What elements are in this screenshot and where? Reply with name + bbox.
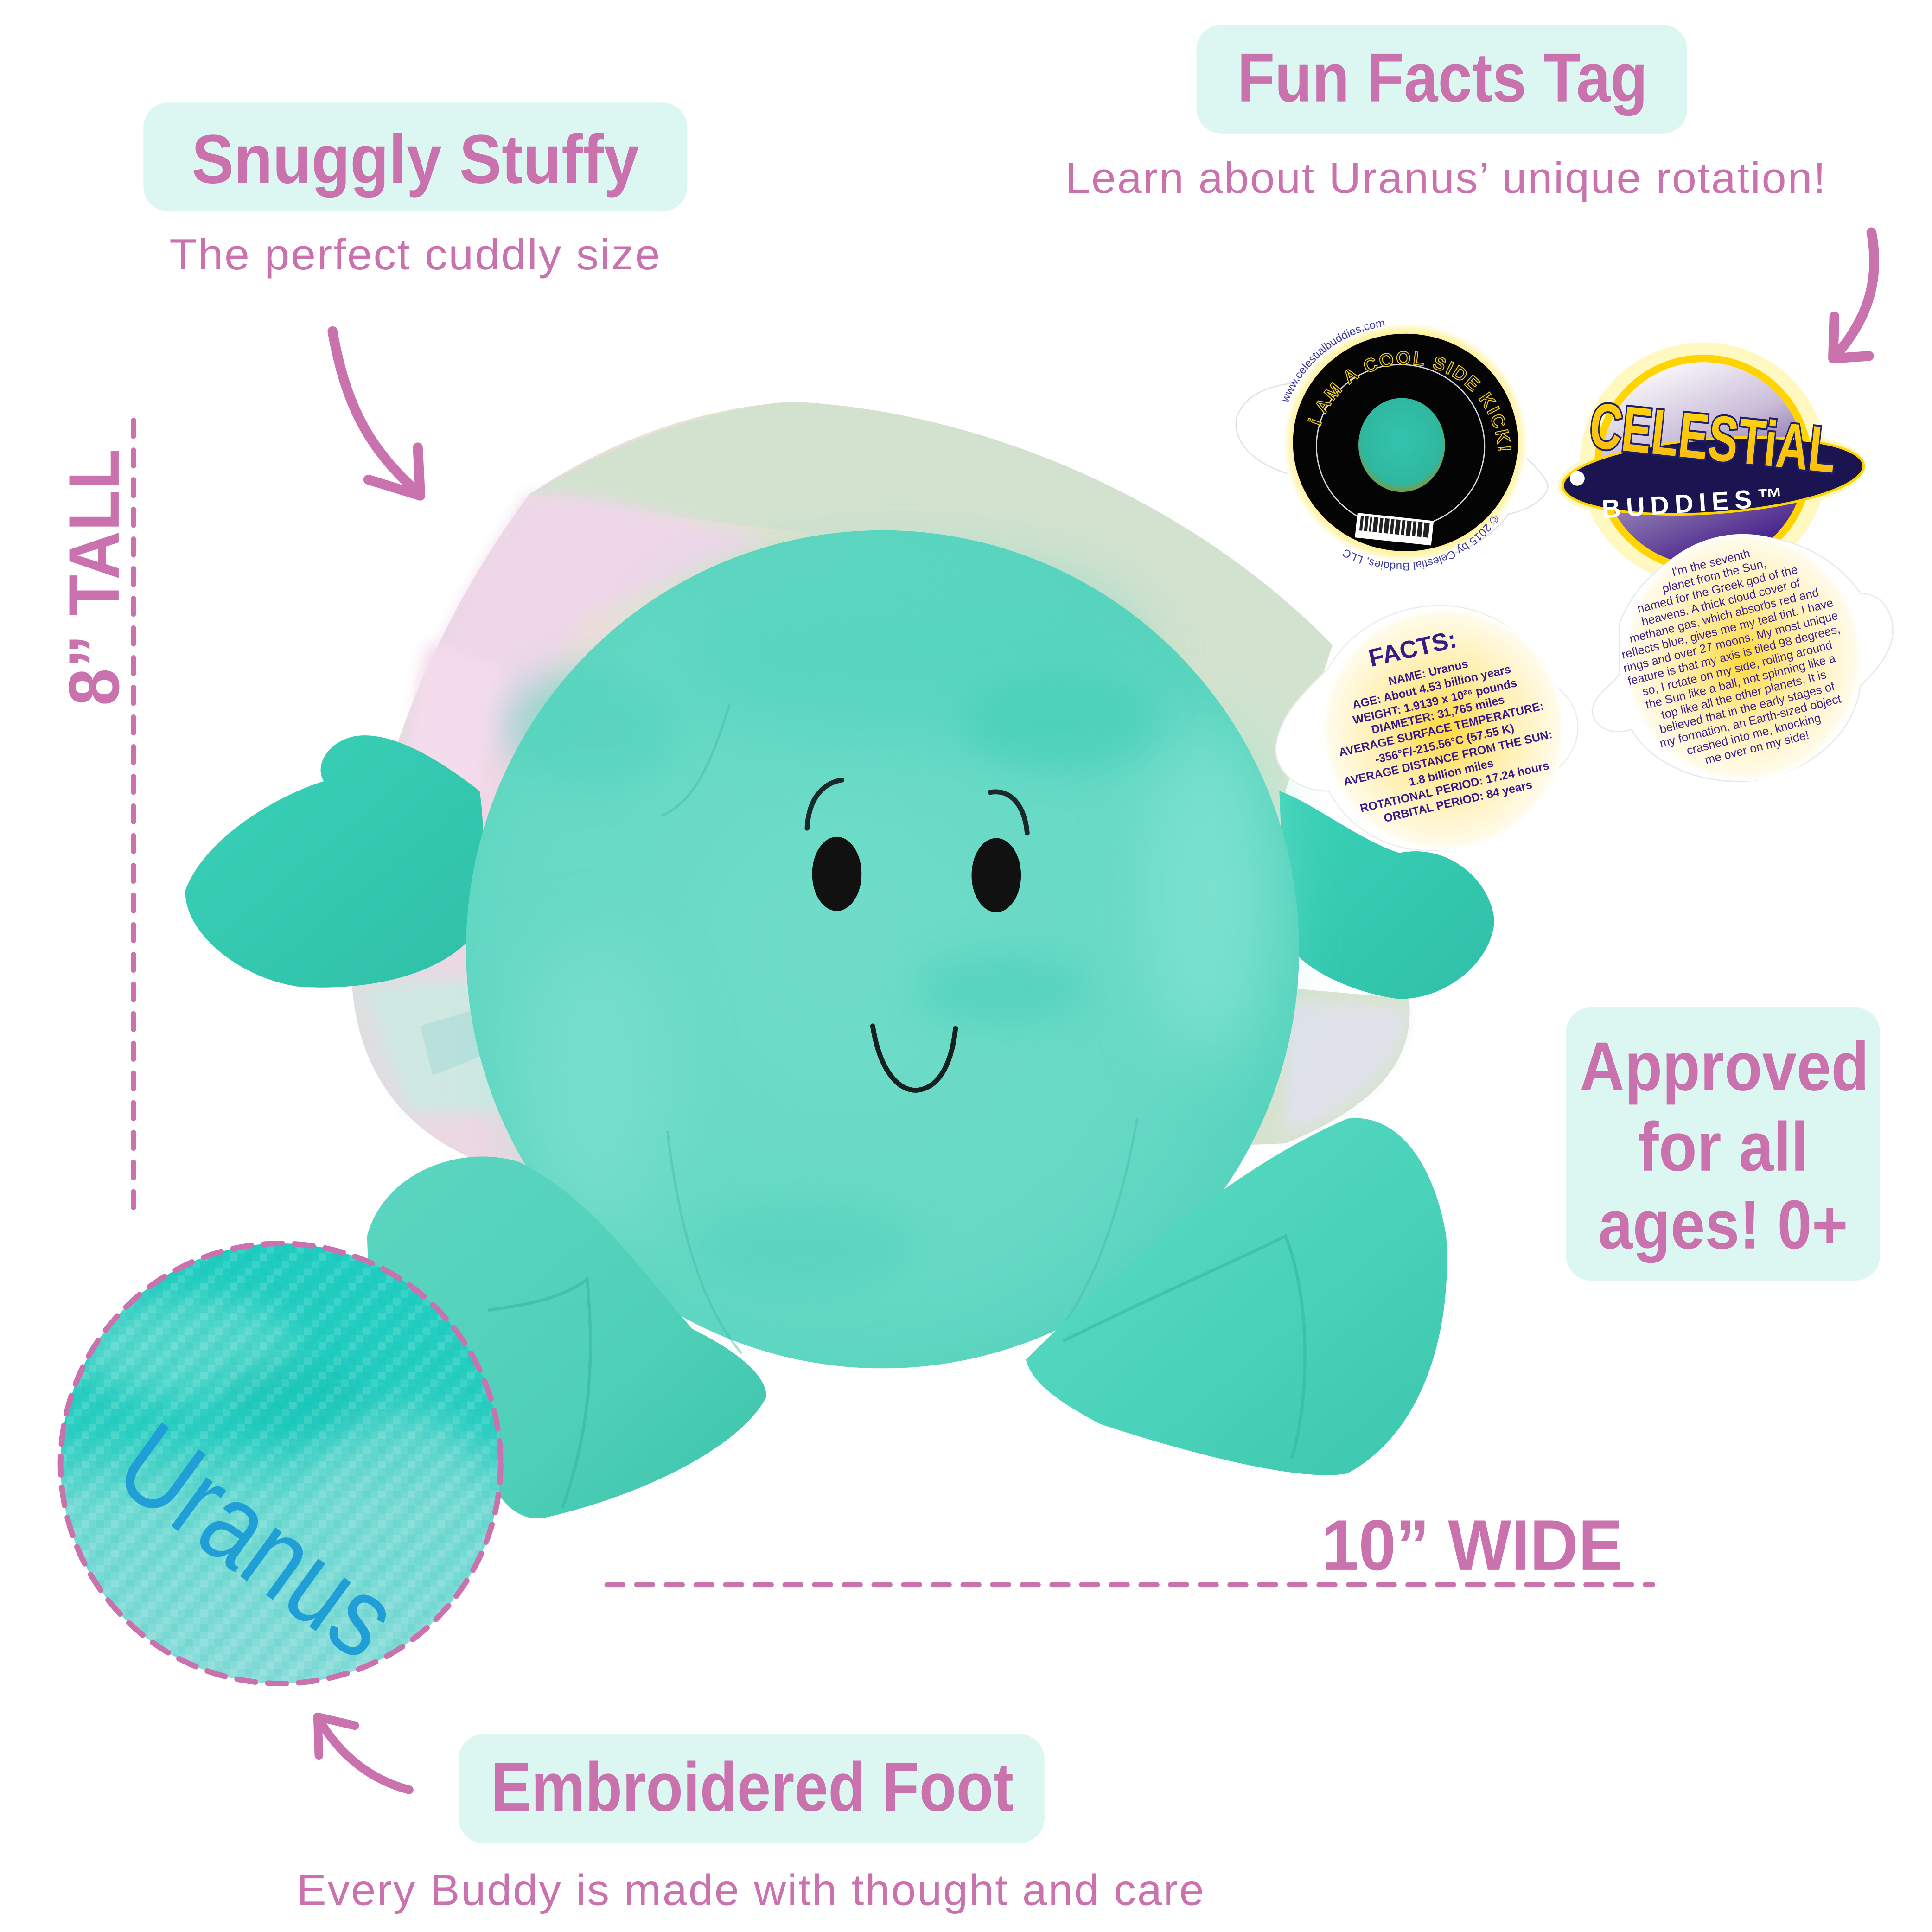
tag: story text: planet from the Sun,	[1661, 557, 1767, 595]
iridescent ring disc	[352, 402, 1410, 1174]
face: right eye	[971, 838, 1021, 912]
tag: story text: the Sun like a ball, not spinning like a	[1644, 652, 1837, 712]
tag: black back of tag: i AM A COOL SIDE KICK!	[1305, 348, 1514, 453]
callout: Approved for all ages: Approved	[1580, 1027, 1869, 1105]
tag: story text: crashed into me, knocking	[1685, 712, 1822, 758]
tag: facts: AVERAGE DISTANCE FROM THE SUN:	[1342, 728, 1554, 789]
tag: story text: feature is that my axis is tiled 98 degrees,	[1626, 623, 1842, 688]
tag: facts: ORBITAL PERIOD: 84 years	[1383, 778, 1533, 825]
tag: Celestial Buddies logo: BUDDIES™	[1601, 482, 1790, 524]
callout: Snuggly Stuffy: The perfect cuddly size	[169, 230, 661, 279]
arrow: to plush	[332, 331, 420, 496]
tag: story text: named for the Greek god of the	[1636, 563, 1799, 616]
tag: black back of tag	[1236, 317, 1548, 573]
callout: Embroidered Foot: Every Buddy is made with thought and care	[297, 1866, 1205, 1914]
arrow: to tags	[1833, 232, 1874, 358]
embroidered name: Uranus: Uranus	[96, 1398, 421, 1683]
callout: Fun Facts Tag: Fun Facts Tag	[1237, 39, 1648, 116]
tag: facts: ROTATIONAL PERIOD: 17.24 hours	[1359, 759, 1550, 815]
tag: facts: FACTS:	[1366, 625, 1459, 672]
tag: story text: methane gas, which absorbs red and	[1628, 586, 1820, 645]
tag: story text	[1592, 530, 1893, 781]
callout: Fun Facts Tag: Learn about Uranus’ unique rotation!	[1065, 154, 1827, 202]
plush: left foot	[367, 1157, 766, 1518]
tag: story text: reflects blue, gives me my teal tint. I have	[1620, 596, 1835, 662]
tag: facts: AVERAGE SURFACE TEMPERATURE:	[1338, 699, 1545, 759]
tag: story text: me over on my side!	[1703, 728, 1811, 767]
tag: story text: rings and over 27 moons. My most unique	[1622, 609, 1839, 675]
tag: story text: so, I rotate on my side, rolling around	[1641, 638, 1834, 698]
width dimension: 10 inch wide: 10” WIDE	[1321, 1505, 1623, 1585]
tag: story text: my formation, an Earth-sized object	[1658, 692, 1843, 750]
callout: Snuggly Stuffy: Snuggly Stuffy	[191, 121, 639, 198]
tag: black back of tag: www.celestialbuddies.com	[1279, 317, 1386, 404]
tag: story text: top like all the other planets. It is	[1660, 668, 1828, 722]
tag: facts: WEIGHT: 1.9139 x 10²⁶ pounds	[1352, 676, 1518, 727]
callout: Approved for all ages: ages! 0+	[1598, 1186, 1848, 1263]
callout: Approved for all ages	[1566, 1007, 1880, 1281]
tag: story text: heavens. A thick cloud cover of	[1640, 576, 1802, 629]
tag: facts: DIAMETER: 31,765 miles	[1370, 693, 1506, 736]
tag: Celestial Buddies logo	[1555, 342, 1869, 585]
arrow: to zoom circle	[318, 1717, 409, 1790]
face: mouth	[873, 1026, 956, 1090]
tag: facts	[1275, 606, 1578, 851]
callout: Fun Facts Tag	[1065, 25, 1827, 202]
height dimension: 8 inch tall: 8” TALL	[54, 449, 134, 706]
tag: story text: believed that in the early stages of	[1658, 680, 1836, 736]
tag: black back of tag: © 2015 by Celestial Buddies, LLC	[1340, 512, 1501, 573]
callout: Embroidered Foot	[297, 1734, 1205, 1914]
tag: facts: AGE: About 4.53 billion years	[1351, 663, 1512, 712]
tag: facts: NAME: Uranus	[1387, 657, 1469, 688]
face: eyebrows	[807, 780, 1027, 833]
tag: story text: I'm the seventh	[1671, 547, 1751, 579]
zoom circle: embroidered foot detail	[61, 1243, 501, 1683]
face: left eye	[812, 837, 861, 911]
tag: facts: 1.8 billion miles	[1408, 757, 1495, 789]
plush: left arm	[185, 735, 483, 988]
plush: round body	[466, 530, 1299, 1368]
callout: Snuggly Stuffy	[143, 102, 687, 279]
tag: facts: -356°F/-215.56°C (57.55 K)	[1374, 721, 1515, 766]
barcode	[1355, 513, 1434, 545]
plush: right foot	[1026, 1118, 1447, 1475]
plush: right arm	[1279, 791, 1494, 999]
callout: Approved for all ages: for all	[1638, 1108, 1808, 1186]
callout: Embroidered Foot: Embroidered Foot	[491, 1748, 1014, 1826]
